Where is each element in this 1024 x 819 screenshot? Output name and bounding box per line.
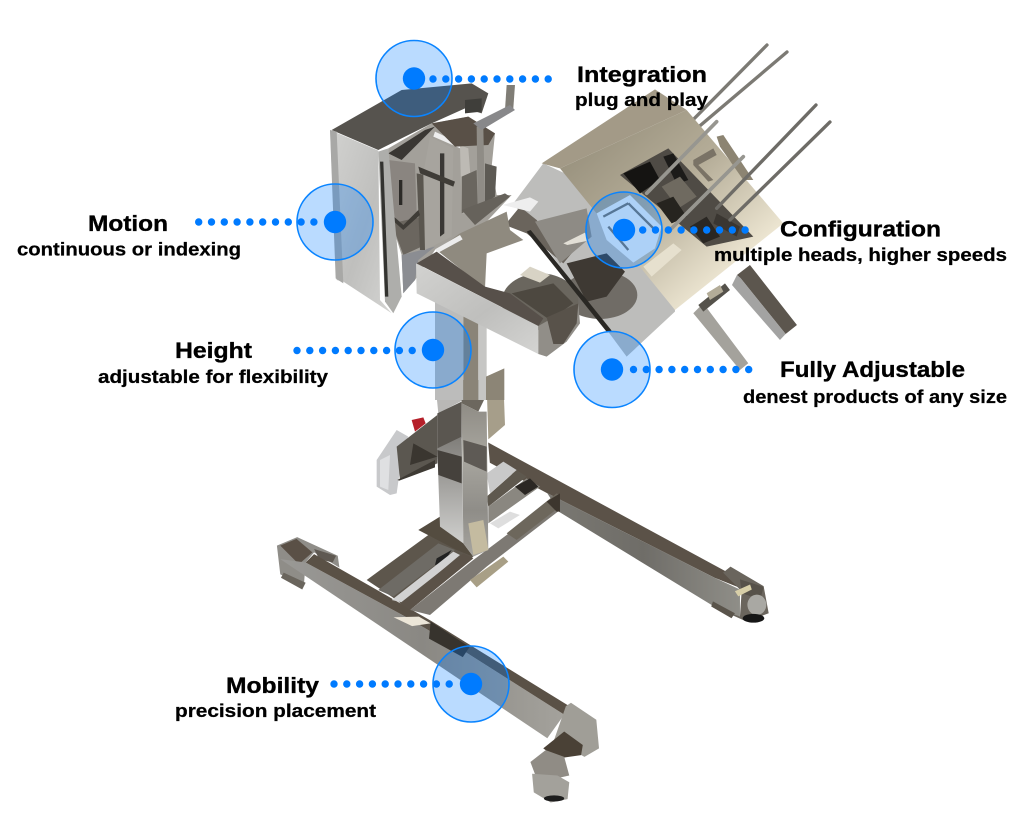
machine illustration: support arm, motor and column top bbox=[416, 197, 637, 400]
subtitle: precision placement bbox=[175, 701, 376, 721]
marker bbox=[586, 192, 662, 268]
marker bbox=[376, 40, 452, 116]
dotted leader bbox=[639, 226, 749, 234]
rods in front bbox=[647, 105, 830, 230]
callout: Mobility bbox=[175, 646, 509, 722]
heading: Integration bbox=[577, 62, 707, 87]
sliding pad bbox=[470, 557, 508, 587]
red valve bbox=[412, 417, 426, 432]
marker bbox=[574, 332, 650, 408]
support arm bbox=[416, 212, 580, 357]
drive housing bbox=[502, 197, 637, 333]
dotted leader bbox=[429, 75, 552, 83]
housing interior bbox=[388, 117, 512, 293]
top ledge bbox=[542, 89, 687, 168]
rear panel of column bbox=[435, 380, 463, 543]
housing side panel bbox=[330, 130, 402, 313]
heading: Height bbox=[175, 338, 253, 363]
cross frame bbox=[367, 462, 560, 615]
machine illustration: feeder grey side panel bbox=[513, 163, 675, 357]
dotted leader bbox=[293, 347, 416, 354]
callout: Height bbox=[98, 312, 471, 388]
machine illustration: left housing bbox=[330, 83, 515, 313]
heading: Motion bbox=[88, 211, 168, 236]
front corner and castor bbox=[530, 703, 599, 802]
handle and top block bbox=[465, 85, 515, 130]
raised rail bbox=[717, 135, 753, 180]
column front bbox=[462, 380, 505, 557]
open frame behind configuration marker bbox=[597, 195, 662, 263]
callout: Configuration bbox=[586, 192, 1007, 268]
subtitle: adjustable for flexibility bbox=[98, 367, 328, 387]
dotted leader bbox=[330, 680, 453, 688]
heading: Configuration bbox=[780, 216, 941, 242]
subtitle: continuous or indexing bbox=[17, 240, 241, 260]
callout: Integration bbox=[376, 40, 708, 116]
machine illustration: rear guide bars bbox=[693, 265, 797, 370]
slotted area bbox=[643, 243, 682, 277]
machine illustration: column and cross frame bbox=[367, 380, 560, 615]
rear leg bar bbox=[488, 443, 769, 623]
magazine window bbox=[620, 148, 753, 247]
subtitle: multiple heads, higher speeds bbox=[714, 245, 1007, 265]
callout: Fully Adjustable bbox=[574, 332, 1007, 408]
callout: Motion bbox=[17, 184, 373, 260]
rods behind plate edge bbox=[653, 45, 787, 160]
marker bbox=[297, 184, 373, 260]
upper column bbox=[435, 300, 504, 400]
subtitle: denest products of any size bbox=[743, 387, 1007, 407]
heading: Fully Adjustable bbox=[780, 357, 965, 382]
subtitle: plug and play bbox=[575, 90, 708, 110]
machine illustration: base frame and legs bbox=[277, 443, 769, 802]
lower plate hardware bbox=[698, 283, 730, 312]
heading: Mobility bbox=[226, 673, 320, 698]
dotted leader bbox=[195, 218, 318, 226]
cross bracket and air cylinder bbox=[377, 415, 437, 495]
front leg bar bbox=[277, 537, 569, 738]
beige plate bbox=[560, 110, 783, 310]
marker bbox=[433, 646, 509, 722]
marker bbox=[395, 312, 471, 388]
dotted leader bbox=[630, 366, 752, 373]
housing top bbox=[332, 83, 488, 150]
machine illustration: feeder plate with magazine window and rods bbox=[542, 45, 830, 312]
